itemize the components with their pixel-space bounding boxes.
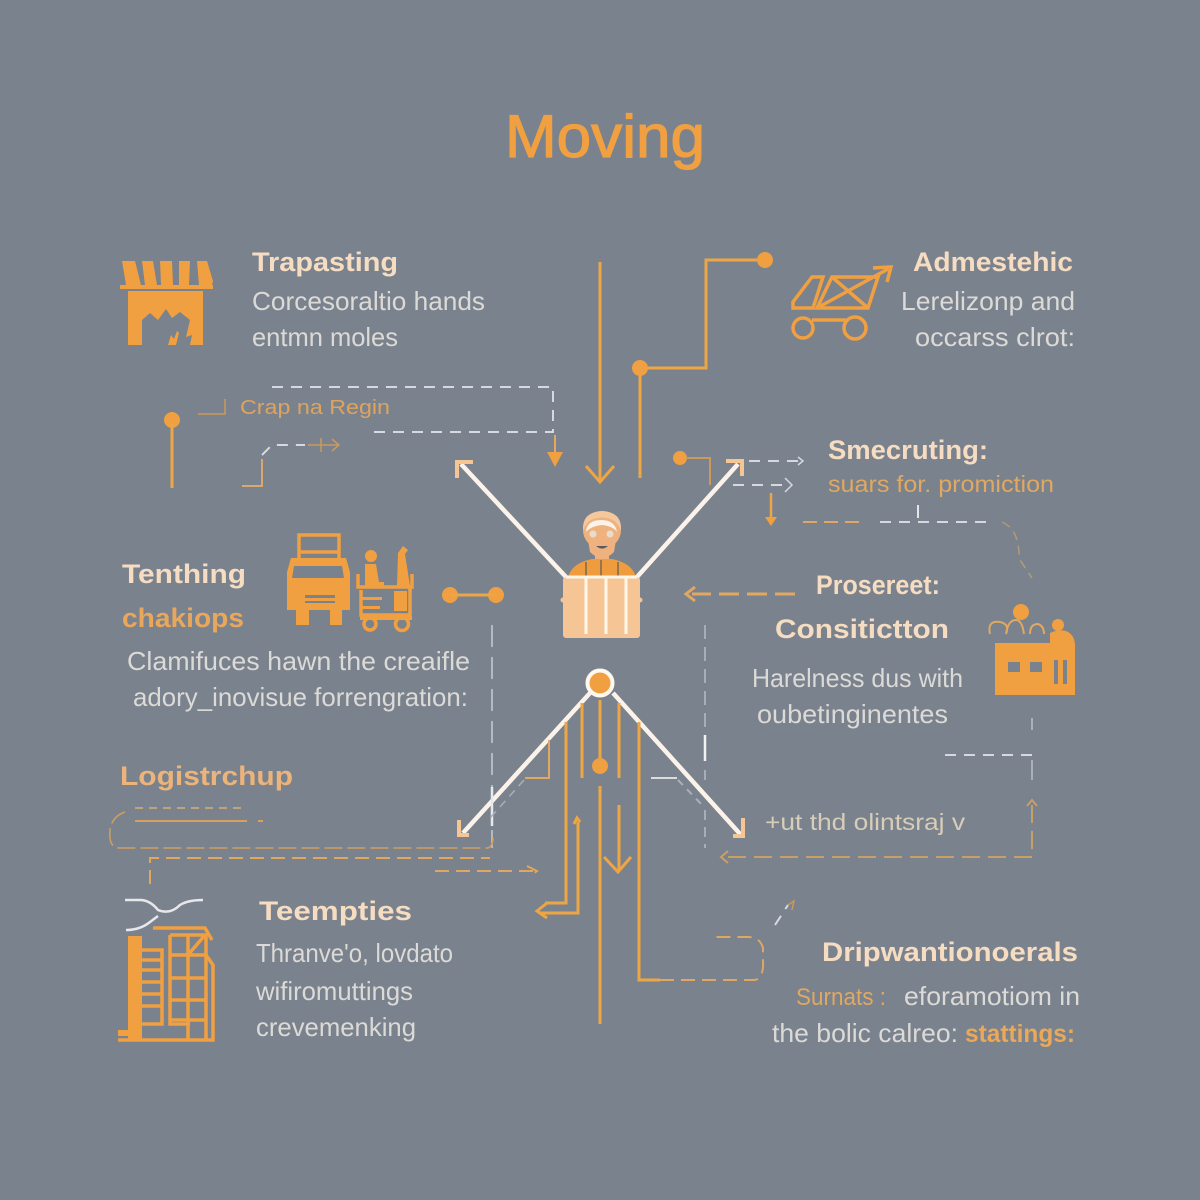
description: Thranve'o, lovdato	[256, 938, 453, 968]
icon: building	[118, 900, 213, 1040]
panel: Trapasting	[120, 247, 485, 352]
heading: Prosereet:	[816, 570, 940, 600]
description: Lerelizonp and	[901, 286, 1075, 316]
icon: truck	[287, 535, 350, 625]
description accent: Surnats :	[796, 984, 886, 1011]
panel: Teempties	[118, 896, 453, 1042]
connector dot	[673, 451, 710, 485]
arrow: up right	[637, 461, 742, 577]
heading: Dripwantionoerals	[822, 937, 1078, 967]
person	[568, 511, 636, 577]
arrow: up left	[457, 462, 566, 577]
description line 2: the bolic calreo:	[772, 1018, 958, 1048]
pin marker	[164, 412, 180, 488]
arrow: top centre down	[586, 262, 614, 482]
dashed route: bottom centre	[660, 901, 794, 980]
heading line 2: Consitictton	[775, 614, 949, 644]
description line 2: wifiromuttings	[255, 976, 413, 1006]
small routed arrow	[242, 438, 339, 486]
arrow: left dashed	[686, 587, 795, 601]
dashed route	[272, 387, 553, 432]
panel: Tenthing chakiops	[122, 535, 470, 712]
subtitle: suars for. promiction	[828, 471, 1054, 497]
dashed route right	[945, 718, 1032, 780]
central illustration	[457, 461, 743, 836]
description: Clamifuces hawn the creaifle	[127, 646, 470, 676]
connector: dumbbell	[442, 587, 504, 603]
dashed return arrow	[721, 800, 1037, 863]
description: Corcesoraltio hands	[252, 286, 485, 316]
description line 2: occarss clrot:	[915, 322, 1075, 352]
icon: person with cart	[358, 546, 412, 630]
dashed arrows	[730, 457, 803, 492]
heading: Logistrchup	[120, 761, 293, 791]
dashed route box	[110, 808, 537, 884]
divider route: right dashed	[651, 625, 705, 848]
connector: top right step line	[632, 252, 773, 478]
description line 2: oubetinginentes	[757, 699, 948, 729]
arrow: down left	[459, 693, 590, 835]
heading: Smecruting:	[828, 435, 988, 465]
heading: Tenthing	[122, 559, 246, 589]
icon: storefront	[120, 261, 213, 345]
vertical lines under hub	[537, 700, 660, 1024]
heading: Trapasting	[252, 247, 398, 277]
heading accent: chakiops	[122, 603, 244, 633]
description line 2: entmn moles	[252, 322, 398, 352]
icon: factory with people	[989, 604, 1075, 695]
divider route: left dashed	[490, 625, 549, 848]
elbow line	[198, 399, 225, 414]
panel: Prosereet Consitictton	[686, 570, 1075, 863]
icon: cart	[793, 267, 891, 339]
arrow: down to centre	[547, 435, 563, 467]
description: Harelness dus with	[752, 663, 963, 693]
arrow: small down	[765, 493, 777, 526]
panel: Dripwantionoerals	[772, 937, 1080, 1048]
heading: Admestehic	[913, 247, 1073, 277]
dashed route	[803, 505, 1032, 578]
description line 2: adory_inovisue forrengration:	[133, 682, 468, 712]
heading: Teempties	[259, 896, 412, 926]
description line 3: crevemenking	[256, 1012, 416, 1042]
panel: Admestehic	[793, 247, 1075, 352]
caption: +ut thd olintsraj v	[765, 809, 966, 835]
title: Moving	[505, 103, 705, 170]
panel: Smecruting	[673, 435, 1054, 578]
panel: Logistrchup	[110, 761, 537, 884]
crate	[560, 577, 642, 638]
label: Crap na Regin	[240, 397, 390, 419]
panel: Crap na Regin connector	[164, 387, 563, 488]
description: eforamotiom in	[904, 981, 1080, 1011]
description highlight: stattings:	[965, 1020, 1075, 1048]
hub node	[588, 670, 612, 696]
arrow: down right	[613, 693, 743, 836]
